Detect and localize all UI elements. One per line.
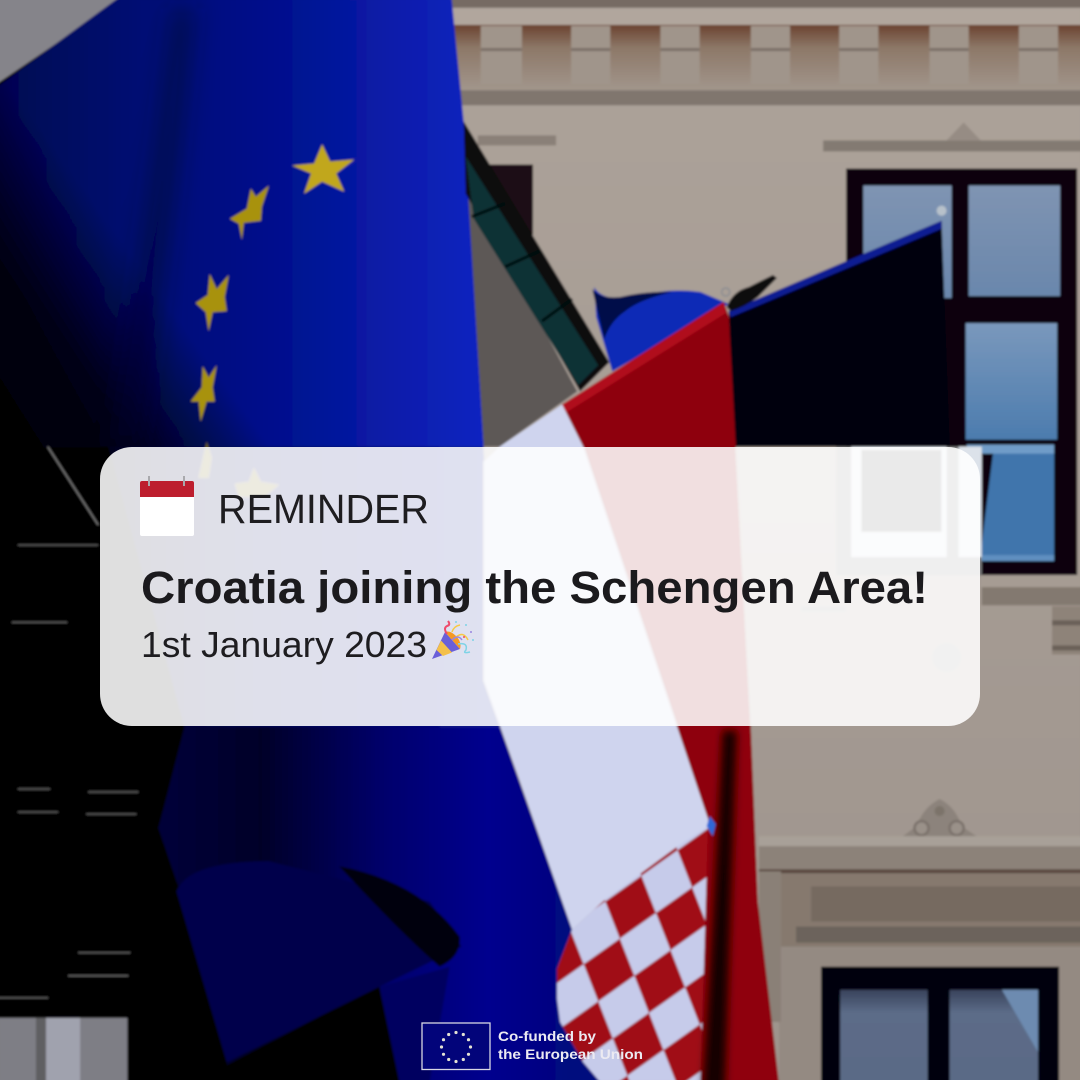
- dark flag panel with blue rim: [729, 221, 950, 447]
- EU flag upper part: [0, 0, 484, 447]
- icon: party popper: [432, 621, 474, 659]
- EU flag behind panel: [108, 447, 500, 727]
- funding text: the European Union: [498, 1046, 643, 1062]
- reminder panel: [100, 447, 980, 726]
- co-funded by the EU logo: [422, 1023, 643, 1070]
- icon: calendar: [140, 476, 194, 536]
- chequered shield: [557, 823, 713, 1080]
- Croatian flag: [484, 302, 779, 1080]
- funding text: [498, 1028, 643, 1062]
- EU flag folds: [0, 0, 299, 447]
- upper window left fragment: [478, 135, 556, 235]
- upper cornice with dentils: [450, 0, 1080, 105]
- hanging red edge: [701, 447, 779, 1080]
- gutter and grey wall: [464, 121, 609, 447]
- date: 1st January 2023: [141, 624, 427, 665]
- EU flag gold stars: [191, 144, 354, 497]
- icon: EU flag: [422, 1023, 490, 1070]
- EU flag lower lobes: [158, 727, 600, 1080]
- heading: reminder: REMINDER: [218, 486, 429, 532]
- distant blue flag: [594, 287, 729, 371]
- blue edge diamonds: [753, 936, 772, 1022]
- dark staircase area: [0, 0, 440, 1080]
- title: Croatia joining the Schengen Area!: [141, 562, 928, 613]
- white stripe: [484, 404, 714, 930]
- lower window: [821, 967, 1059, 1080]
- panel background: [100, 447, 980, 726]
- funding text: Co-funded by: [498, 1028, 596, 1044]
- red stripe: [562, 302, 736, 1080]
- lower cornice and ornament: [759, 799, 1080, 1080]
- upper window right: [801, 122, 1080, 672]
- flagpole finial: [722, 275, 777, 311]
